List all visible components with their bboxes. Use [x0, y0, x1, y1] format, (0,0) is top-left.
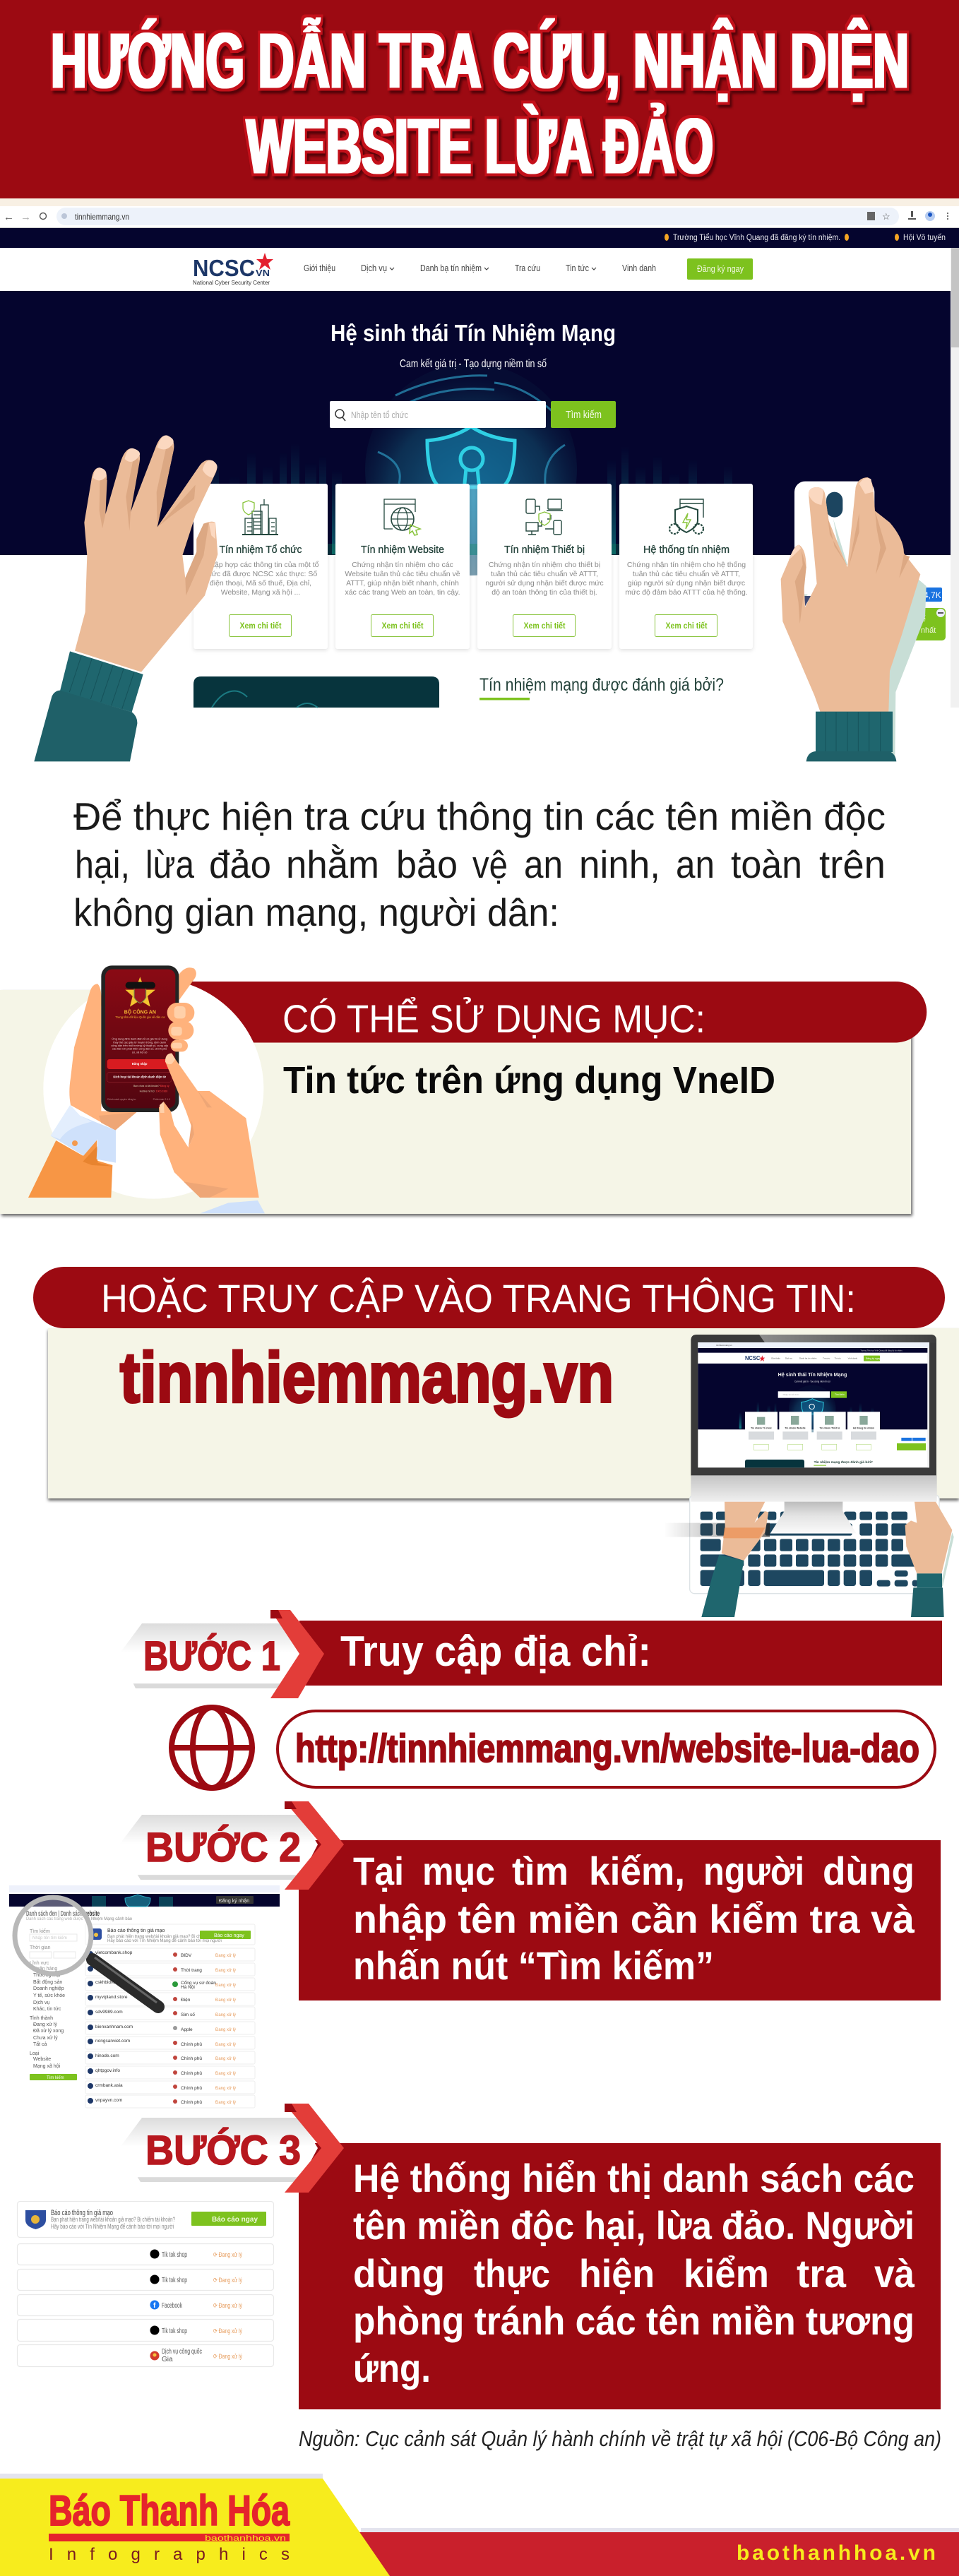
step 2	[119, 1801, 941, 2000]
navigation bar: Giới thiệu	[304, 263, 335, 273]
screenshot: danh sách website: Hà Nội	[181, 1985, 195, 1990]
screenshot: danh sách website: BIDV	[181, 1953, 192, 1958]
screenshot: danh sách website: Danh sách các trang web được Tín Nhiệm Mạng cảnh báo	[26, 1917, 133, 1921]
intro paragraph: an	[524, 842, 563, 886]
panel: website access: HOẶC TRUY CẬP VÀO TRANG THÔNG TIN:	[101, 1276, 856, 1320]
step 3: kiểm	[684, 2251, 769, 2296]
filter column: Dịch vụ	[33, 2000, 49, 2005]
filter column: Chưa xử lý	[33, 2035, 58, 2041]
logo: NCSC: VN	[256, 268, 270, 278]
filter column: Nhập tên tìm kiếm	[32, 1936, 67, 1940]
card: hệ thống: giúp người sử dụng nhận biết được	[628, 579, 745, 588]
step 2: người	[703, 1849, 804, 1893]
hero: search: Cam kết giá trị - Tạo dựng niềm tin số	[400, 358, 547, 370]
step 3: tra	[797, 2251, 847, 2296]
step 3: thực	[474, 2251, 550, 2296]
scrollbar	[951, 248, 959, 708]
screenshot: result list: Báo cáo thông tin giả mạo	[51, 2209, 113, 2217]
illustration: hands holding phone: Bạn chưa có tài khoản? Đăng ký	[133, 1085, 169, 1087]
mini website: Giới thiệu	[771, 1356, 780, 1359]
card: website: ATTT, giúp nhận biết nhanh, chính	[346, 579, 459, 588]
intro paragraph: ninh,	[579, 842, 660, 886]
sleeve	[28, 1139, 112, 1198]
screenshot: result list: Bạn phát hiện trang web/tài khoản giả mạo? Bị chiếm tài khoản?	[51, 2216, 175, 2223]
footer	[0, 2474, 959, 2576]
website: baothanhhoa.vn	[737, 2541, 936, 2565]
VNeID text: Tin tức trên ứng dụng VneID	[283, 1059, 775, 1102]
screenshot: danh sách website: Đang xử lý	[215, 2086, 236, 2091]
screenshot: result list: ⟳ Đang xử lý	[213, 2353, 242, 2360]
screenshot: result list: Tik tok shop	[162, 2277, 187, 2284]
card: hệ thống: Hệ thống tín nhiệm	[643, 544, 729, 556]
card: thiết bị: người sử dụng nhận biết được mức	[485, 579, 604, 588]
intro paragraph: toàn	[731, 842, 802, 886]
logo: Báo Thanh Hóa: Báo Thanh Hóa	[49, 2487, 290, 2534]
card: website: Chứng nhận tín nhiệm cho các	[352, 561, 453, 569]
globe	[365, 364, 577, 576]
mini website: tinnhiemmang.vn	[716, 1344, 732, 1347]
card: tổ chức: Website, Mạng xã hội ...	[221, 588, 300, 597]
illustration: hands holding phone: công dân trên môi trường kỹ thuật số, cung cấp	[111, 1044, 168, 1047]
chat widgets	[897, 588, 946, 640]
icon: building	[242, 499, 278, 535]
step 3	[119, 2104, 941, 2409]
chat widgets: ôi để	[909, 615, 926, 624]
screenshot: result list: Tik tok shop	[162, 2327, 187, 2335]
screenshot: danh sách website: Bạn phát hiện trang web/tài khoản giả mạo? Bị chiếm tài khoản?	[107, 1935, 229, 1939]
logo: NCSC: NCSC	[193, 255, 255, 281]
screenshot: result list: Tik tok shop	[162, 2251, 187, 2259]
intro paragraph: đảo	[209, 842, 271, 886]
screenshot: result list: ⟳ Đang xử lý	[213, 2327, 242, 2334]
navigation bar	[0, 248, 951, 291]
screenshot: danh sách website: Báo cáo thông tin giả mạo	[107, 1928, 165, 1933]
chevron	[270, 1610, 324, 1698]
monitor	[691, 1335, 936, 1476]
mini website: Nhập tên tổ chức	[783, 1393, 799, 1396]
illustration: hands holding phone	[28, 965, 265, 1213]
intro paragraph: hại,	[75, 842, 130, 886]
hero: search: Hệ sinh thái Tín Nhiệm Mạng	[330, 320, 616, 346]
filter column: Website	[33, 2057, 51, 2062]
card: thiết bị: Xem chi tiết	[524, 621, 565, 631]
mini website: Dịch vụ	[785, 1356, 792, 1359]
step 2: nhấn nút “Tìm kiếm”	[353, 1943, 714, 1988]
card: tổ chức: Xem chi tiết	[240, 621, 281, 631]
mini website: Trường Tiểu học Vĩnh Quang đã đăng ký tín nhiệm.	[860, 1349, 903, 1352]
title	[51, 18, 909, 190]
hero: search	[0, 291, 951, 576]
mini website	[698, 1342, 929, 1467]
card: hệ thống: mức độ đảm bảo ATTT của hệ thống.	[625, 588, 748, 597]
screenshot: danh sách website: Đang xử lý	[215, 2027, 236, 2032]
card: website	[335, 484, 470, 649]
illustration: hands holding phone: các tiện ích phát triển công dân số, chính phủ	[112, 1048, 167, 1051]
logo: NCSC: National Cyber Security Center	[193, 279, 270, 286]
screenshot: danh sách website: qhtpgov.info	[95, 2068, 120, 2073]
step 1: Truy cập địa chỉ:	[340, 1628, 651, 1675]
filter column: Tìm kiếm	[30, 1928, 50, 1934]
illustration: hands holding phone: thay thế các giấy tờ truyền thông, định danh	[113, 1041, 166, 1044]
mini website: Cam kết giá trị - Tạo dựng niềm tin số	[794, 1381, 830, 1383]
heading: đánh giá	[480, 675, 724, 700]
screenshot: danh sách website: Đang xử lý	[215, 1998, 236, 2003]
mini website: Hệ sinh thái Tín Nhiệm Mạng	[778, 1371, 847, 1378]
screenshot: result list: Hãy báo cáo với Tín Nhiệm Mạng để cảnh báo tới mọi người	[51, 2223, 174, 2230]
hero: search: Nhập tên tổ chức	[351, 410, 408, 420]
ticker bar: Trường Tiểu học Vĩnh Quang đã đăng ký tín nhiệm.	[673, 232, 840, 242]
icon: shield gears	[669, 499, 703, 534]
card: tổ chức: Là tập hợp các thông tin của một tổ	[202, 561, 319, 569]
screenshot: danh sách website: Báo cáo ngay	[214, 1933, 244, 1938]
illustration: right hand with mouse	[781, 477, 927, 761]
screenshot: danh sách website: Sim số	[181, 2011, 195, 2017]
panel: website access	[33, 1267, 959, 1617]
filter column: Bất động sản	[33, 1979, 62, 1985]
screenshot: danh sách website: Đang xử lý	[215, 1983, 236, 1988]
mini website: Danh bạ tín nhiệm	[799, 1356, 817, 1359]
sleeve	[60, 651, 143, 712]
card: thiết bị: Tín nhiệm Thiết bị	[504, 544, 585, 556]
card: website: Website tuân thủ các tiêu chuẩn về	[345, 570, 460, 578]
illustration: hands holding phone: Hotline hỗ trợ: 1900.0368	[140, 1089, 167, 1092]
step 3: ứng.	[353, 2346, 431, 2390]
filter column: Loại	[30, 2051, 40, 2056]
step box	[299, 2143, 941, 2409]
filter column	[30, 1928, 77, 2069]
badge	[119, 2118, 318, 2182]
screenshot: danh sách website: Đang xử lý	[215, 2071, 236, 2076]
website name: tinnhiemmang.vn	[120, 1338, 614, 1417]
hand left	[722, 1502, 768, 1561]
navigation bar: Dịch vụ	[361, 263, 387, 273]
icon: devices	[526, 499, 563, 535]
panel: VNeID: CÓ THỂ SỬ DỤNG MỤC:	[282, 996, 705, 1041]
filter column: Doanh nghiệp	[33, 1986, 64, 1991]
illustration: hands holding phone: Trung tâm dữ liệu Quốc gia về dân cư	[115, 1015, 165, 1019]
browser address bar: ☆	[882, 211, 890, 222]
step 2: tìm	[512, 1849, 568, 1893]
filter column: Mạng xã hội	[33, 2064, 61, 2069]
card: website: xác các trang Web an toàn, tin cậy.	[345, 588, 460, 597]
screenshot: danh sách website: hinode.com	[95, 2053, 119, 2058]
illustration: hands holding phone: BỘ CÔNG AN	[124, 1008, 156, 1015]
icon: globe	[172, 1707, 252, 1788]
logo: Báo Thanh Hóa: baothanhhoa.vn	[205, 2534, 286, 2543]
illustration: desktop and keyboard	[664, 1335, 954, 1617]
card: tổ chức: chức đã được NCSC xác thực: Số	[204, 570, 317, 578]
step 3: dùng	[353, 2251, 445, 2296]
step 2: mục	[422, 1849, 495, 1893]
illustration: left hand	[34, 435, 218, 761]
card: hệ thống: Chứng nhận tín nhiệm cho hệ thống	[627, 561, 746, 569]
screenshot: danh sách website: Đang xử lý	[215, 1968, 236, 1973]
back hand	[69, 984, 136, 1131]
intro paragraph: Để thực hiện tra cứu thông tin các tên miền độc	[73, 794, 886, 838]
back finger	[179, 967, 196, 1001]
screenshot: danh sách website: Hãy báo cáo với Tín Nhiệm Mạng để cảnh báo tới mọi người	[107, 1938, 222, 1943]
cuff	[816, 712, 893, 752]
intro paragraph: không gian mạng, người dân:	[73, 890, 559, 934]
intro paragraph: lừa	[145, 842, 194, 886]
card: tổ chức	[193, 484, 328, 649]
logo: NCSC	[193, 253, 273, 286]
screenshot: danh sách website: Đang xử lý	[215, 1953, 236, 1958]
screenshot: danh sách website: vietcombank.shop	[95, 1950, 133, 1955]
filter column: Ngân hàng	[33, 1967, 57, 1972]
screenshot: danh sách website: cskhbidvbank.com	[95, 1980, 133, 1985]
step 3: tên miền độc hại, lừa đảo. Người	[353, 2203, 915, 2248]
card: tổ chức: Tín nhiệm Tổ chức	[219, 544, 302, 556]
screenshot: danh sách website: Đang xử lý	[215, 2056, 236, 2061]
filter column: Đang xử lý	[33, 2022, 57, 2027]
illustration: hands holding phone: Đăng nhập	[132, 1062, 148, 1066]
panel: VNeID	[0, 965, 927, 1214]
logo: Báo Thanh Hóa: Infographics	[49, 2545, 290, 2564]
badge	[119, 1815, 318, 1880]
heading pill	[33, 1267, 945, 1328]
filter column: Y tế, sức khỏe	[33, 1992, 65, 1998]
filter column: Thời gian	[30, 1945, 51, 1950]
screenshot: result list: ⟳ Đang xử lý	[213, 2277, 242, 2284]
screenshot: result list: Dịch vụ công quốc	[162, 2347, 202, 2356]
mini website: Tra cứu	[823, 1356, 830, 1359]
card: website: Tín nhiệm Website	[361, 544, 444, 556]
badge	[119, 1623, 299, 1688]
heading pill	[184, 982, 927, 1042]
chat widgets: mới nhất	[905, 626, 936, 635]
screenshot: danh sách website: Chính phủ	[181, 2070, 202, 2076]
screenshot: danh sách website: Đang xử lý	[215, 2100, 236, 2105]
pointing hand	[159, 1054, 259, 1198]
screenshot: danh sách website: Apple	[181, 2027, 193, 2032]
step 3: Hệ thống hiển thị danh sách các	[353, 2156, 915, 2200]
filter column: Tất cả	[33, 2041, 47, 2047]
phone	[101, 965, 179, 1112]
screenshot: danh sách website: Chính phủ	[181, 2056, 202, 2061]
list rows	[85, 1948, 255, 2108]
chevron	[285, 2104, 344, 2193]
screenshot: danh sách website: Cổng vụ sứ đoàn	[181, 1980, 216, 1986]
hand right	[941, 1532, 954, 1587]
screenshot: danh sách website: Chính phủ	[181, 2099, 202, 2105]
step 3: phòng tránh các tên miền tương	[353, 2298, 915, 2343]
keyboard	[690, 1495, 939, 1594]
screenshot: danh sách website	[9, 1885, 280, 2108]
intro paragraph: bảo	[396, 842, 458, 886]
shield lock	[427, 427, 515, 490]
url pill	[278, 1711, 935, 1787]
screenshot: danh sách website: Chính phủ	[181, 2041, 202, 2047]
card: hệ thống	[619, 484, 753, 649]
ticker bar: Hội Vô tuyến	[903, 232, 946, 242]
screenshot: danh sách website: Chính phủ	[181, 2085, 202, 2091]
intro paragraph: nhằm	[286, 842, 379, 886]
logo: Báo Thanh Hóa	[49, 2487, 290, 2564]
step 2: nhập tên miền cần kiểm tra và	[353, 1897, 915, 1941]
illustration: hands holding phone: Chính sách quyền riêng tư	[107, 1098, 136, 1101]
step 3: hiện	[579, 2251, 655, 2296]
screenshot: result list: f	[153, 2302, 156, 2310]
heading: đánh giá: Tín nhiệm mạng được đánh giá bởi?	[480, 675, 724, 695]
screenshot: danh sách website: Tìm kiếm	[47, 2076, 64, 2080]
screenshot: danh sách website: Thời trang	[181, 1968, 202, 1973]
intro paragraph: trên	[819, 842, 886, 886]
chevron	[285, 1801, 344, 1890]
intro paragraph: an	[676, 842, 715, 886]
hero: search: Tìm kiếm	[566, 409, 602, 421]
step 1: BƯỚC 1	[143, 1633, 280, 1679]
filter column: Lĩnh vực	[30, 1961, 49, 1966]
navigation bar: Tra cứu	[515, 263, 540, 273]
card: website: Xem chi tiết	[381, 621, 424, 631]
report card	[85, 1924, 255, 1945]
card: thiết bị: tuân thủ các tiêu chuẩn về ATTT,	[491, 570, 598, 578]
filter column: Tỉnh thành	[30, 2015, 53, 2021]
mini website: Tín nhiệm Website	[785, 1427, 806, 1430]
step 2: Tại	[353, 1849, 404, 1893]
mini website: Tín nhiệm Thiết bị	[819, 1427, 840, 1430]
intro paragraph: vệ	[472, 842, 508, 886]
card: hệ thống: Xem chi tiết	[665, 621, 708, 631]
browser address bar: tinnhiemmang.vn	[75, 212, 129, 222]
ticker bar	[0, 228, 959, 248]
navigation bar: Đăng ký ngay	[697, 263, 744, 274]
browser address bar: →	[20, 211, 31, 223]
screenshot: danh sách website: sdv9989.com	[95, 2010, 123, 2015]
mini website: Vinh danh	[848, 1356, 857, 1359]
illustration: hands holding phone: Ứng dụng định danh điện tử có giá trị sử dụng	[112, 1037, 167, 1041]
mini website: Hệ thống tín nhiệm	[853, 1427, 874, 1430]
screenshot: danh sách website: Điện	[181, 1998, 191, 2003]
card: thiết bị	[477, 484, 612, 649]
screenshot: result list: Gia	[162, 2356, 173, 2363]
screenshot: result list: ⟳ Đang xử lý	[213, 2302, 242, 2309]
filter column: Đã xử lý xong	[33, 2028, 64, 2034]
screenshot: result list	[17, 2202, 274, 2367]
mini website: Tin tức	[835, 1356, 841, 1359]
icon: web globe	[384, 499, 420, 535]
mini website: Tín nhiệm Tổ chức	[751, 1427, 772, 1430]
intro paragraph	[73, 794, 886, 934]
step 2: kiếm,	[589, 1849, 685, 1893]
screenshot: danh sách website: Danh sách đen | Danh sách website	[26, 1910, 100, 1918]
screenshot: danh sách website: Đang xử lý	[215, 2042, 236, 2047]
illustration: hands holding phone: Kích hoạt tài khoản định danh điện tử	[113, 1075, 167, 1079]
screenshot: result list: ⟳ Đang xử lý	[213, 2251, 242, 2258]
panel: trust cards	[193, 484, 753, 649]
step box	[299, 1840, 941, 2000]
glowing city bars	[212, 443, 732, 554]
dark video thumbnail	[193, 676, 439, 708]
mini website: Tín nhiệm mạng được đánh giá bởi?	[814, 1460, 873, 1464]
step 2: dùng	[823, 1849, 915, 1893]
screenshot: result list: Báo cáo ngay	[212, 2216, 258, 2224]
illustration: hands holding phone: Phiên bản 2.1.0	[153, 1098, 170, 1101]
filter column: Khác, tin tức	[33, 2007, 61, 2012]
browser address bar	[4, 208, 948, 225]
header banner	[0, 0, 959, 198]
card: tổ chức: điện thoại, Mã số thuế, Địa chỉ,	[210, 579, 311, 588]
fingers	[167, 1003, 194, 1022]
navigation bar: Danh bạ tín nhiệm	[420, 263, 482, 273]
illustration: hands holding phone: số, xã hội số	[132, 1051, 148, 1054]
screenshot: danh sách website: myvipland.store	[95, 1995, 128, 2000]
card: hệ thống: tuân thủ các tiêu chuẩn về ATTT,	[633, 570, 740, 578]
navigation bar: Tin tức	[566, 263, 589, 273]
screenshot: result list: Facebook	[162, 2302, 183, 2310]
stand shadow	[664, 1523, 770, 1537]
screenshot: danh sách website: vnpayvn.com	[95, 2098, 122, 2103]
chat widgets: h 4,7K	[917, 590, 941, 600]
step 2: BƯỚC 2	[145, 1825, 301, 1871]
screenshot: danh sách website: crmbank.asia	[95, 2083, 123, 2088]
panel: website screenshot	[0, 198, 959, 761]
step band	[299, 1621, 942, 1686]
mini website: Tìm kiếm	[835, 1393, 845, 1396]
browser address bar: ←	[4, 211, 14, 223]
card: thiết bị: độ an toàn thông tin của thiết bị.	[492, 588, 597, 597]
icon: magnifier	[15, 1897, 158, 2007]
step 3: BƯỚC 3	[145, 2128, 301, 2174]
screenshot: danh sách website: nongsanviet.com	[95, 2039, 130, 2044]
navigation bar: Vinh danh	[622, 263, 656, 273]
mini website: Đăng ký ngay	[866, 1357, 881, 1360]
step 1	[119, 1610, 942, 1698]
mini website: NCSC	[745, 1355, 761, 1361]
screenshot: danh sách website: bienxanhnam.com	[95, 2025, 133, 2029]
filter column: Thương mại	[33, 1973, 61, 1978]
step 3: và	[874, 2251, 915, 2296]
screenshot: danh sách website: Đang xử lý	[215, 2012, 236, 2017]
card: thiết bị: Chứng nhận tín nhiệm cho thiết bị	[489, 561, 600, 569]
screenshot: danh sách website: Đăng ký nhận	[219, 1899, 249, 1904]
